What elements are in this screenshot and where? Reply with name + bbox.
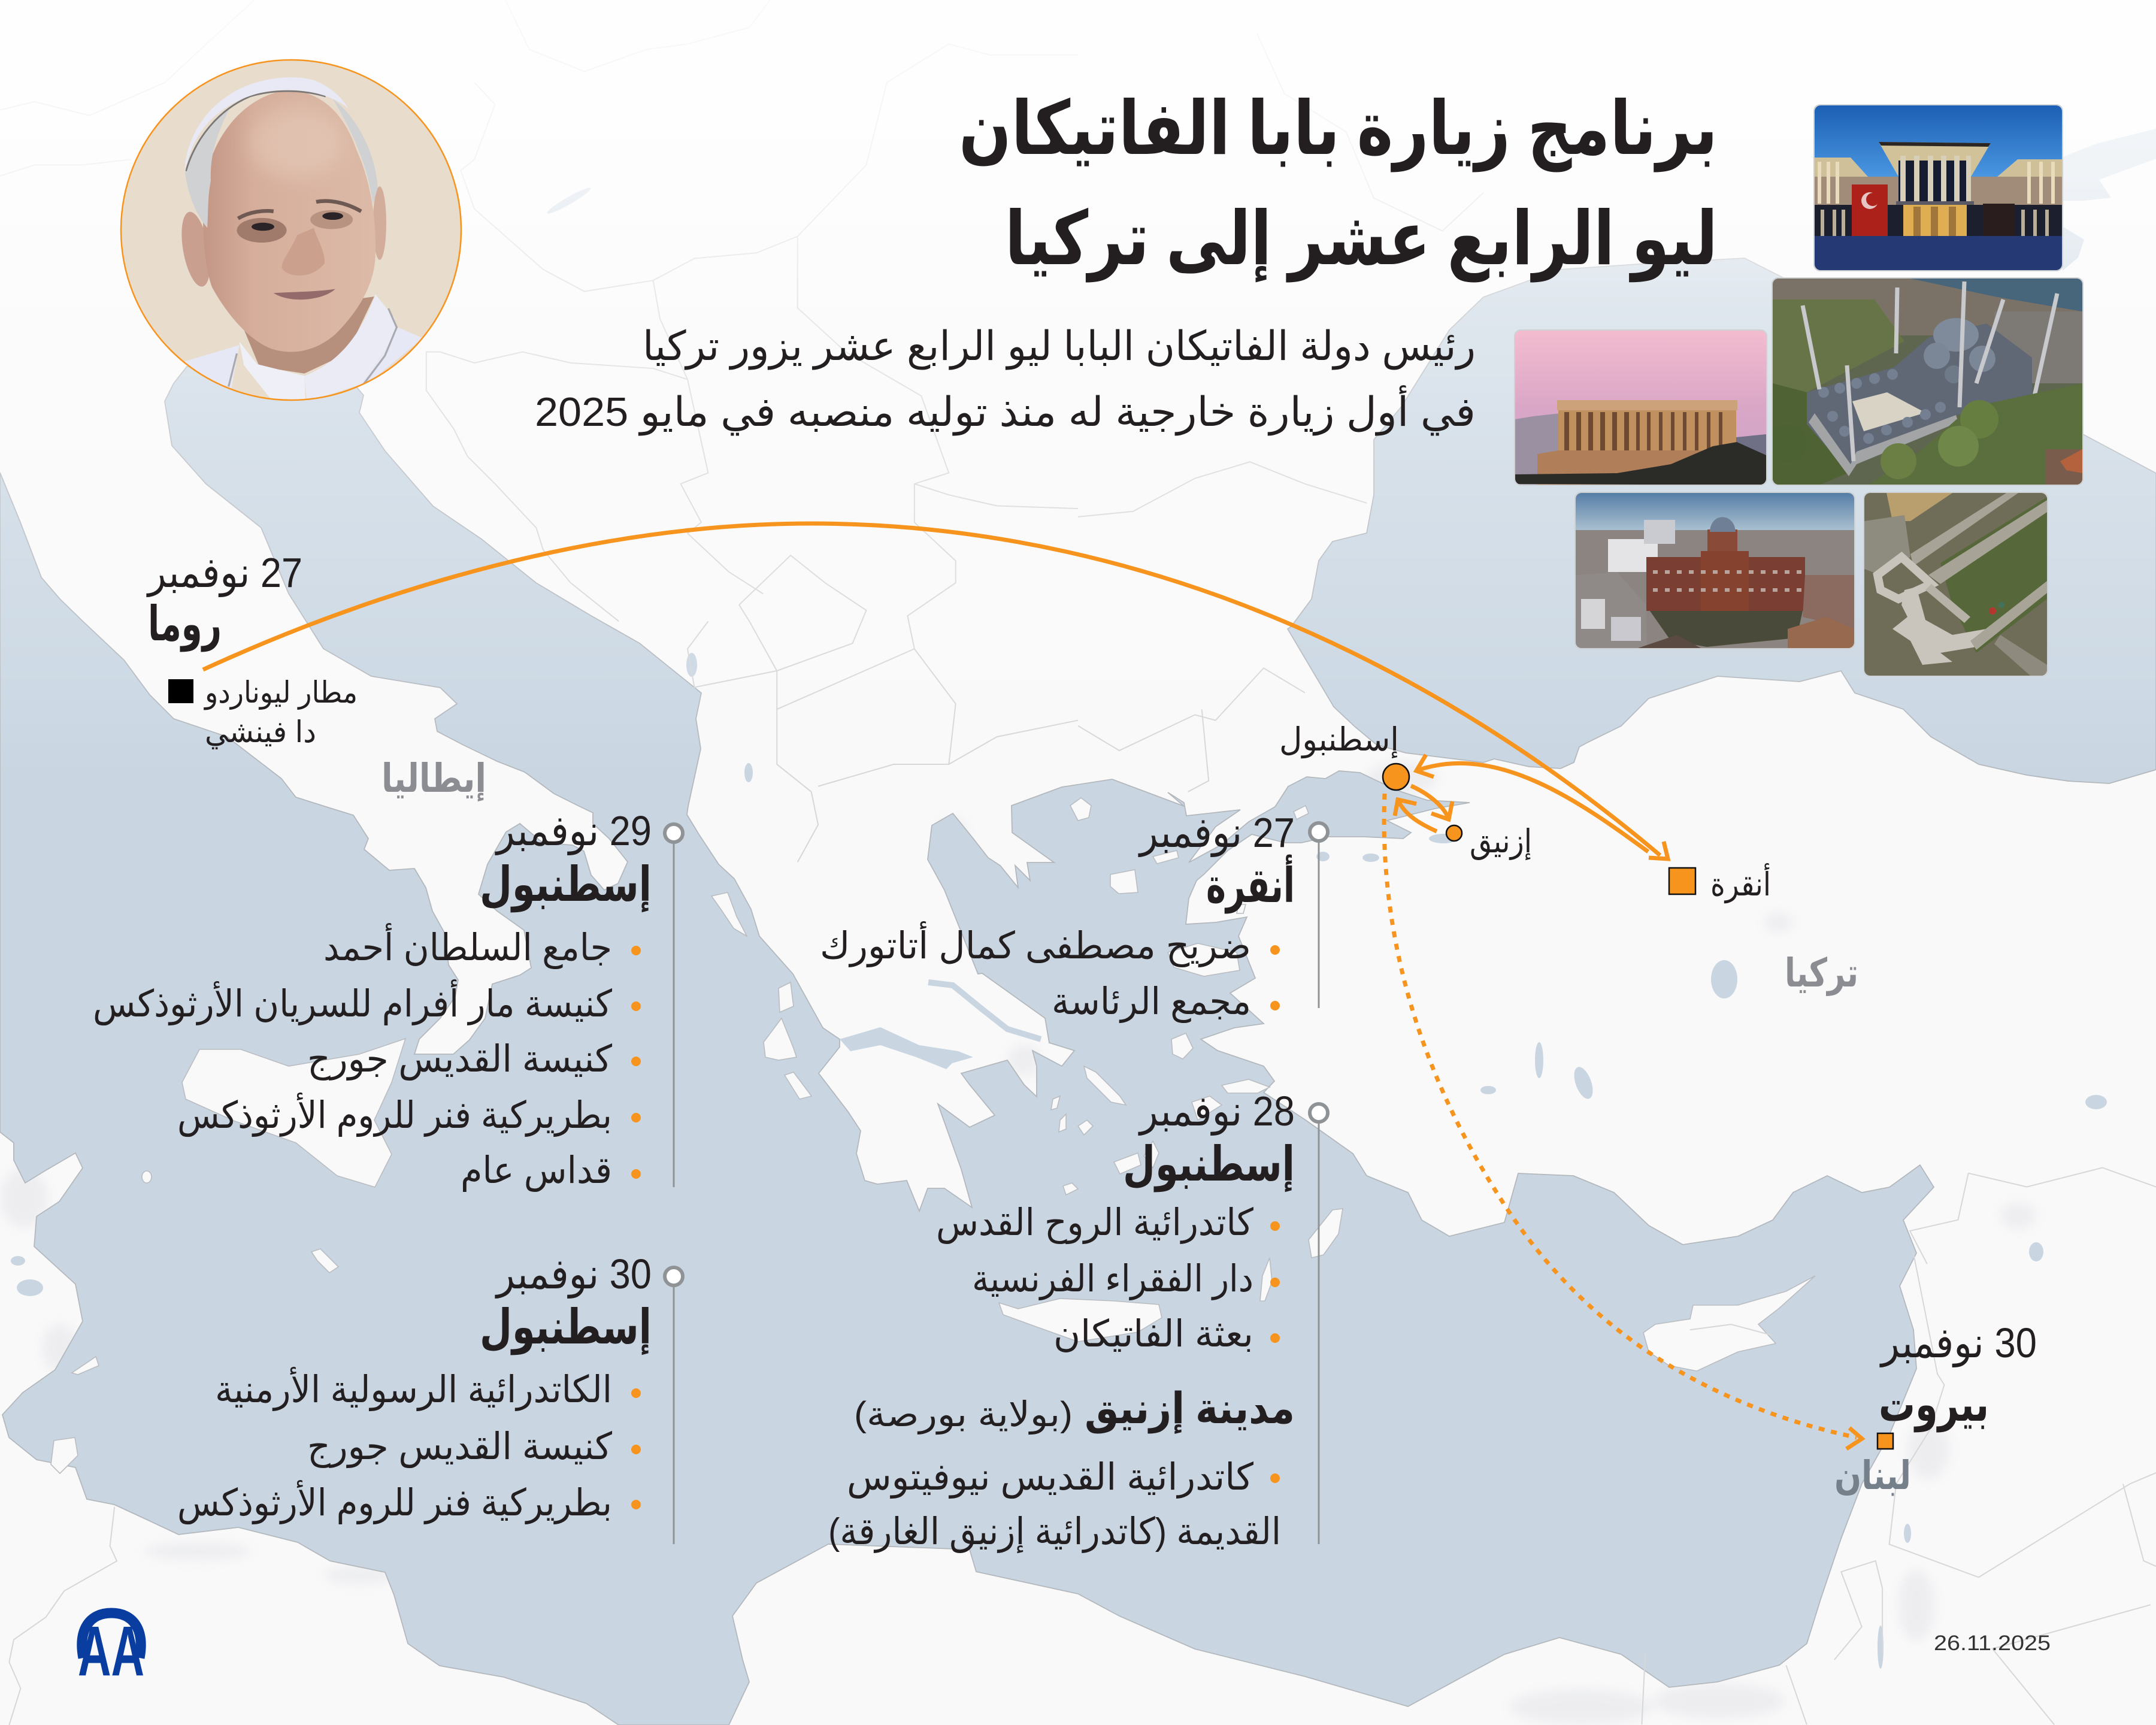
panel: 27 november ankara: 27 نوفمبر (1138, 809, 1295, 857)
rome block: 27 نوفمبر (146, 549, 302, 597)
panel: 30 november istanbul: بطريركية فنر للروم الأرثوذكس (177, 1479, 612, 1524)
panel: 29 november istanbul: إسطنبول (480, 858, 652, 913)
neck (238, 296, 374, 374)
panel: 28 november istanbul and iznik: القديمة (كاتدرائية إزنيق الغارقة) (828, 1511, 1281, 1554)
route: rome to ankara arc (203, 523, 1668, 859)
panel: 29 november istanbul: جامع السلطان أحمد (323, 923, 612, 969)
title (959, 87, 1718, 283)
panel: 28 november istanbul and iznik (828, 1088, 1328, 1554)
main sea: Mediterranean, Adriatic, Aegean, Marmara (0, 365, 1934, 1725)
robes (184, 327, 422, 388)
label: turkey: تركيا (1785, 951, 1858, 996)
panel: 29 november istanbul: بطريركية فنر للروم الأرثوذكس (177, 1092, 612, 1137)
label: rome airport: دا فينشي (205, 715, 316, 749)
islands (51, 798, 1815, 1473)
label: rome airport (203, 676, 358, 749)
photo: anitkabir (1514, 329, 1767, 486)
photo: fener greek school (1574, 492, 1855, 649)
subtitle (535, 323, 1476, 436)
portrait (120, 59, 462, 403)
panel: 30 november istanbul (177, 1251, 683, 1544)
title: برنامج زيارة بابا الفاتيكان (959, 87, 1718, 172)
marker: iznik (1446, 825, 1462, 841)
panel: 29 november istanbul: كنيسة مار أفرام للسريان الأرثوذكس (93, 979, 612, 1025)
urban texture on land (0, 762, 2036, 1725)
panel: 30 november istanbul: 30 نوفمبر (495, 1251, 652, 1299)
panel: 28 november istanbul and iznik: كاتدرائية القديس نيوفيتوس (847, 1457, 1253, 1499)
label: italy: إيطاليا (381, 756, 486, 802)
top fade over map (0, 0, 2156, 779)
panel: 30 november istanbul: إسطنبول (480, 1300, 652, 1355)
subtitle: رئيس دولة الفاتيكان البابا ليو الرابع عشر يزور تركيا (643, 323, 1476, 370)
forehead highlight (250, 107, 344, 178)
cap (185, 77, 348, 174)
portrait ring (121, 60, 461, 400)
marker: ankara (1669, 868, 1695, 894)
label: lebanon: لبنان (1834, 1453, 1911, 1497)
panel: 27 november ankara (820, 809, 1328, 1023)
panel: 28 november istanbul and iznik: بعثة الفاتيكان (1053, 1314, 1253, 1355)
brows and eyes (237, 201, 361, 243)
panel: 28 november istanbul and iznik: (بولاية بورصة) (854, 1395, 1073, 1435)
marker: istanbul (1383, 764, 1409, 790)
panel: 29 november istanbul (93, 807, 683, 1192)
photo: presidential complex (1813, 104, 2063, 271)
logo: anadolu agency (78, 1612, 144, 1691)
label: istanbul: إسطنبول (1279, 722, 1399, 758)
date: 26.11.2025 (1934, 1632, 2051, 1655)
label: iznik: إزنيق (1470, 824, 1532, 861)
face (203, 90, 376, 352)
panel: 28 november istanbul and iznik: كاتدرائية الروح القدس (936, 1202, 1253, 1244)
nose (281, 228, 325, 276)
subtitle: في أول زيارة خارجية له منذ توليه منصبه في مايو 2025 (535, 385, 1476, 436)
panel: 29 november istanbul: قداس عام (461, 1150, 612, 1192)
euboean gulf and corinth gulf (840, 982, 1041, 1069)
panel: 29 november istanbul: 29 نوفمبر (495, 807, 652, 855)
logo: anadolu agency: AA (78, 1612, 144, 1691)
photo: iznik basilica ruins (1863, 492, 2048, 677)
panel: 28 november istanbul and iznik: 28 نوفمبر (1138, 1088, 1295, 1136)
mouth (274, 289, 335, 299)
rome block: روما (148, 597, 222, 652)
panel: 27 november ankara: مجمع الرئاسة (1052, 981, 1251, 1023)
panel: 27 november ankara: ضريح مصطفى كمال أتاتورك (820, 921, 1251, 967)
route: iznik to istanbul (1395, 800, 1437, 831)
panel: 30 november istanbul: الكاتدرائية الرسولية الأرمنية (215, 1366, 612, 1411)
marker: beirut (1878, 1433, 1893, 1449)
label: ankara: أنقرة (1710, 863, 1771, 903)
panel: 28 november istanbul and iznik: دار الفقراء الفرنسية (972, 1258, 1253, 1300)
panel: 30 november istanbul: كنيسة القديس جورج (307, 1426, 612, 1468)
ears (177, 186, 386, 289)
beirut block: 30 نوفمبر (1879, 1320, 2037, 1367)
route: ankara to istanbul (1416, 755, 1648, 852)
panel: 29 november istanbul: كنيسة القديس جورج (307, 1039, 612, 1081)
route: istanbul to beirut dotted (1384, 794, 1862, 1449)
route: istanbul to iznik (1411, 786, 1452, 819)
panel: 28 november istanbul and iznik: إسطنبول (1123, 1137, 1295, 1193)
hair (185, 99, 378, 228)
collar (229, 294, 396, 402)
photo: sultan ahmed mosque (1769, 277, 2084, 486)
beirut block (1879, 1320, 2037, 1433)
title: ليو الرابع عشر إلى تركيا (1005, 198, 1718, 283)
rome block (146, 549, 302, 652)
panel: 28 november istanbul and iznik: مدينة إزنيق (1085, 1385, 1295, 1434)
panel: 27 november ankara: أنقرة (1206, 855, 1295, 914)
black sea (1288, 258, 2156, 783)
marker: rome airport (168, 679, 193, 703)
label: rome airport: مطار ليوناردو (203, 676, 358, 710)
beirut block: بيروت (1879, 1378, 1989, 1433)
